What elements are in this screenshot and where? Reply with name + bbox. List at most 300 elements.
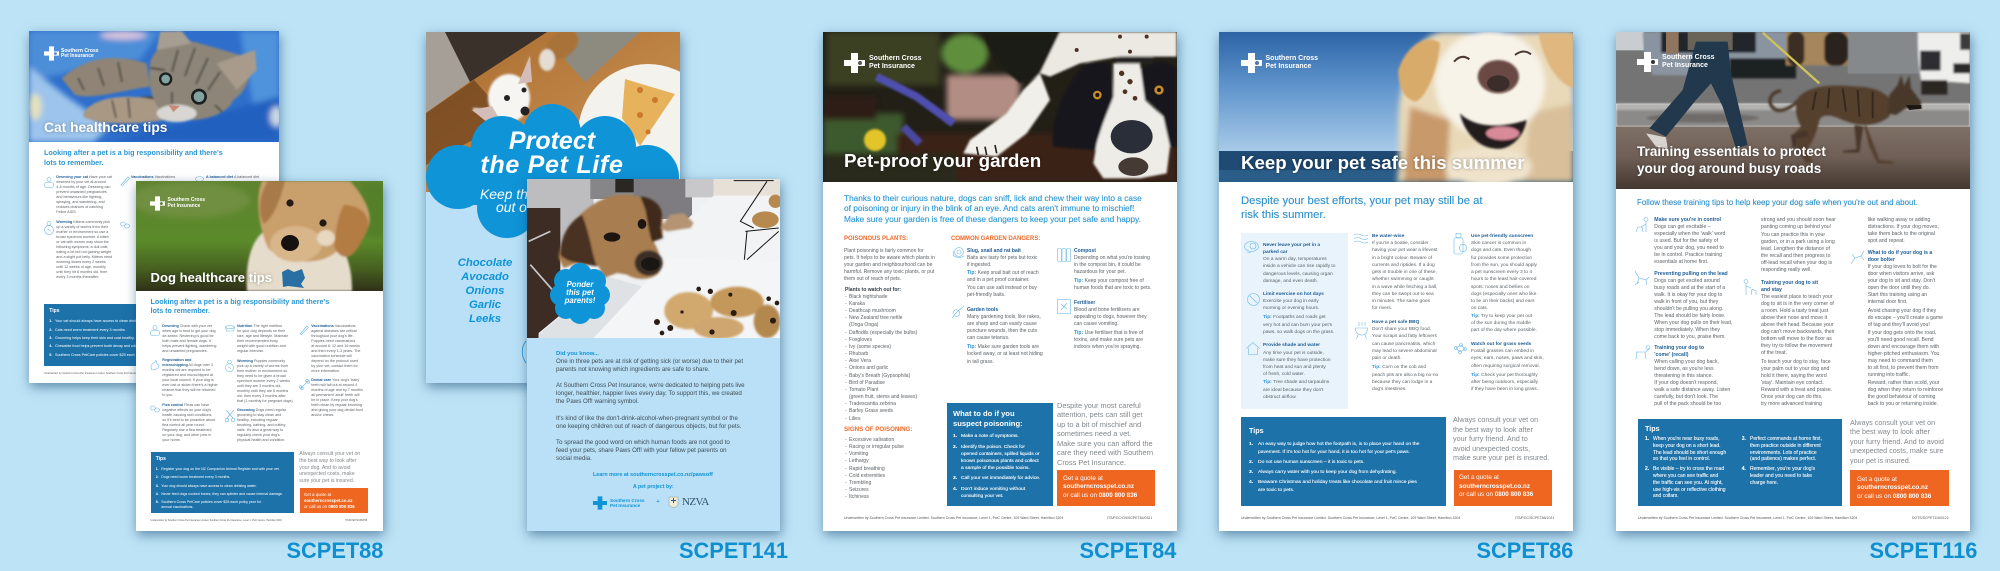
text: come recall: If your dog doesn't respond, — [1654, 380, 1718, 386]
text: make sure in control: Dogs can get excitable – — [1654, 224, 1711, 230]
text: poisonous plants — [844, 248, 935, 283]
text: desexing: spraying, and wandering, and — [56, 200, 105, 204]
text: flea control: your home. — [162, 438, 181, 442]
tip 3 — [1249, 469, 1397, 477]
text: preventing pulling continued: stop immediately. When they — [1654, 327, 1720, 333]
text: grass seeds: Foxtail grasses can embed in — [1471, 349, 1534, 354]
logo: Southern Cross Pet Insurance: Southern Cross — [610, 498, 644, 503]
tips heading: Tips — [1249, 426, 1264, 435]
label: SCPET84: SCPET84 — [1080, 538, 1176, 563]
callout text — [1453, 415, 1549, 463]
text: garden tools tip — [967, 344, 1043, 366]
list: signs of poisoning: - — [845, 494, 847, 500]
tips list: 5. — [49, 353, 52, 357]
text: preventing pulling — [1654, 271, 1728, 320]
tip 2 — [1645, 466, 1726, 500]
icon: fertiliser — [1057, 299, 1071, 314]
logo: Southern Cross — [1266, 55, 1318, 62]
callout text: make sure your pet is insured. — [1453, 453, 1549, 462]
text: sit and stay: dog to sit is in the very corner of — [1761, 301, 1834, 307]
text: registration: chance that they will be returned — [162, 388, 215, 392]
text: fertiliser: Blood and bone fertilisers are — [1074, 307, 1140, 313]
text: garden tools: Many gardening tools, like rakes, — [967, 314, 1041, 320]
text: sunscreen: dogs and cats. Even though — [1471, 248, 1531, 253]
text: flea control: Flea control Fleas can have — [162, 403, 209, 407]
callout text: Despite your most careful — [1057, 400, 1141, 410]
text: compost: Depending on what you're tossing — [1074, 255, 1150, 261]
text: recall practice — [1761, 232, 1835, 274]
list: plants to watch out for: Tradescantia zebrina — [849, 401, 896, 407]
text: dental care: teeth will fall out at around 4 — [311, 383, 357, 387]
callout text — [1057, 400, 1153, 467]
logo: Pet Insurance — [61, 53, 94, 59]
tip 1: keep your dog on a short lead. — [1653, 443, 1721, 449]
text: vaccinations: by your vet, contact them for — [311, 364, 358, 368]
text: fertiliser: appealing to dogs, however they — [1074, 314, 1147, 320]
text: stay continued: like walking away or adding — [1868, 217, 1930, 223]
list: signs of poisoning: Rapid breathing — [849, 466, 885, 472]
tip 1: so that you feel in control. — [1653, 456, 1710, 462]
badge text: this pet — [566, 288, 594, 296]
text: did you know heading: Did you know... — [556, 351, 599, 357]
text: sit and stay: a room. Hold a tasty treat just — [1761, 308, 1828, 314]
tips list: 2. — [49, 328, 52, 332]
text: gets onto the road: may need to command them — [1868, 358, 1933, 364]
quote text: southerncrosspet.co.nz — [304, 498, 352, 503]
text: did you know body: one keeping children out of reach of dangerous objects, but for pets. — [556, 423, 741, 430]
callout text: sure your pet is insured. — [299, 478, 354, 484]
text: worming: until 12 weeks of age, monthly — [56, 264, 106, 268]
tip 1: 1. — [1249, 442, 1253, 447]
text: reward: the good behaviour of coming — [1868, 394, 1935, 400]
text: slug, snail and rat bait: Baits are tasty for pets but toxic — [967, 255, 1037, 261]
text: have a pet safe BBQ: can cause pancreatitis, which — [1372, 342, 1435, 347]
text: desexing: and behaviours like fighting, — [56, 195, 102, 199]
text: sit and stay: bottom will move to the floor as — [1761, 336, 1832, 342]
text: preventing pulling: The lead should be fairly loose. — [1654, 313, 1725, 319]
text: teach stay: try more advanced training — [1761, 401, 1822, 407]
intro — [844, 192, 1142, 224]
text: provide shade: Any time your pet is outside, — [1263, 351, 1324, 356]
text: preventing pulling: busy roads and at the start of a — [1654, 285, 1725, 291]
intro: Make sure your garden is free of these dangers to keep your pet safe and happy. — [844, 214, 1141, 224]
text: worming: that (1 monthly for pregnant dogs). — [237, 398, 294, 402]
footer: Underwritten by Southern Cross Pet Insurance Limited. Southern Cross Pet Insurance, Level 1, PwC Centre, 109 Ward Street, Hamilton 3204 — [844, 516, 1063, 520]
text: flea control: so it's best to be proactive about — [162, 418, 215, 422]
icon: sun — [1247, 293, 1260, 306]
text: vaccinations: vaccination schedule will — [311, 354, 352, 358]
list: plants to watch out for: - — [845, 315, 847, 321]
text: slug tip: pet-friendly baits. — [967, 292, 1005, 298]
text: never leave your pet: On a warm day, temperatures — [1263, 257, 1327, 262]
tip 2: Be visible – try to cross the road — [1653, 466, 1724, 472]
icon: BBQ — [1355, 321, 1368, 339]
text: vaccinations — [311, 324, 360, 373]
panel: Pet-proof your garden flyer — [823, 32, 1177, 531]
text: dental care: all permanent 'adult' teeth will — [311, 393, 359, 397]
text: make sure in control: be in control. Practice training — [1654, 252, 1722, 258]
quote text: or call us on 0800 800 836 — [1857, 493, 1931, 500]
text: registration: ever lost or stolen there's a higher — [162, 383, 218, 387]
text: worming: and a slight pot belly. Kittens need — [56, 254, 112, 258]
text: teach stay: your palm out to your dog and — [1761, 366, 1829, 372]
tips list: Chewable food helps prevent tooth decay and odour. — [55, 344, 141, 348]
list: plants to watch out for: Black nightshade — [849, 294, 887, 300]
list: plants to watch out for: - — [845, 344, 847, 350]
badge text: parents! — [565, 296, 595, 304]
text: dental care: be in place. Keep your dog's — [311, 398, 358, 402]
text: garden tools tip: in tall grass. — [967, 359, 994, 365]
logo: NZVA: NZVA — [682, 496, 709, 508]
text: slug, snail and rat bait: if ingested. — [967, 262, 991, 268]
text: limit exercise tip: paws, so walk dogs on the grass. — [1263, 330, 1334, 335]
callout text: attention, pets can still get — [1057, 410, 1142, 419]
tip 4: 4. — [1249, 480, 1253, 485]
tip 4: are toxic to pets. — [1258, 488, 1294, 493]
list: plants to watch out for: - — [845, 358, 847, 364]
item 2: a sample of the possible toxins. — [961, 466, 1030, 471]
tips list: Never feed dogs cooked bones, they can splinter and cause internal damage. — [161, 492, 283, 496]
tip 4: Remember, you're your dog's — [1750, 466, 1815, 472]
logo — [150, 196, 205, 211]
text: provide shade: Provide shade and water — [1263, 343, 1320, 348]
text: poisonous plants: your garden and neighbourhood can be — [844, 262, 932, 268]
text: be water-wise: Be water-wise — [1372, 234, 1404, 239]
text: did you know body: It's kind of like the don't-drink-alcohol-when-pregnant symbol or the — [556, 415, 738, 422]
intro — [150, 298, 329, 315]
list: signs of poisoning: Racing or irregular pulse — [849, 444, 904, 450]
orange quote box — [1454, 470, 1552, 506]
text: did you know body: social media. — [556, 455, 592, 462]
list: plants to watch out for: Ivy (some species) — [849, 344, 891, 350]
text: fertiliser — [1074, 300, 1147, 328]
logo: Pet Insurance — [869, 63, 915, 70]
badge text — [550, 280, 610, 304]
text: poisonous plants: pets. It helps to be aware which plants in — [844, 255, 935, 261]
text: fertiliser tip: Tip: Use fertiliser that is free of — [1074, 330, 1143, 336]
list: signs of poisoning: - — [845, 480, 847, 486]
tips list: 1. — [156, 467, 159, 471]
list: plants to watch out for: Foxgloves — [849, 337, 872, 343]
text: slug, snail and rat bait — [967, 248, 1037, 269]
text: garden tools tip: Tip: Make sure garden tools are — [967, 344, 1039, 350]
text: BBQ tip: Tip: Corn on the cob and — [1372, 365, 1426, 370]
plus sign: + — [656, 499, 659, 505]
orange quote box — [1057, 470, 1155, 506]
text: nutrition: Nutrition The right nutrition — [237, 324, 282, 328]
list: plants to watch out for: Daffodils (especially the bulbs) — [849, 330, 917, 336]
text: grooming — [237, 408, 286, 442]
text: nutrition: weight with good nutrition and — [237, 344, 286, 348]
text: desexing: when age is best to get your dog — [162, 329, 216, 333]
text: desexing: desexed by your vet at around — [56, 180, 106, 184]
list: plants to watch out for: - — [845, 380, 847, 386]
title: your dog around busy roads — [1637, 160, 1821, 176]
list: signs of poisoning: Itchiness — [849, 494, 869, 500]
photo: person walking dog by road — [1616, 32, 1970, 189]
text: grass seeds: Watch out for grass seeds — [1471, 342, 1531, 347]
list: plants to watch out for: Plants to watch out for: — [845, 287, 901, 293]
text: compost tip — [1074, 278, 1151, 292]
footer: Underwritten by Southern Cross Pet Insurance Limited. Southern Cross Pet Insurance, Level 1, PwC Centre, 109 Ward Street, Hamilton 3204 — [1241, 516, 1460, 520]
callout text: your pet is insured. — [1850, 456, 1911, 465]
text: flea control: health causing skin conditions, — [162, 413, 212, 417]
text: stay continued: spot and repeat. — [1868, 238, 1905, 244]
quote text — [1459, 474, 1533, 500]
panel: Dog healthcare tips flyer — [136, 181, 383, 531]
quote text: Get a quote at — [1063, 474, 1103, 482]
text: never leave your pet — [1263, 242, 1335, 285]
text: BBQ tip: because they can lodge in a — [1372, 380, 1432, 385]
text: limit exercise: Exercise your dog in early — [1263, 299, 1319, 304]
what to do list: Make a note of symptoms. — [961, 434, 1019, 439]
tips list: 2. — [156, 475, 159, 479]
text: worming: their mother or environment so — [237, 368, 287, 372]
text: door bolter: your dog to sit and stay. Don't — [1868, 278, 1935, 284]
text: come recall: carefully, but don't look. The — [1654, 394, 1718, 400]
tip 1: 1. — [1645, 436, 1649, 442]
tip 3: then practice outside in different — [1750, 443, 1821, 449]
icon: door bolter — [1850, 250, 1865, 265]
text: fertiliser tip: indoors when you're spraying. — [1074, 344, 1141, 350]
text: BBQ tip: peach pits are also a big no-no — [1372, 373, 1438, 378]
text: worming — [56, 220, 112, 279]
text: grooming: healthy, including regular — [237, 418, 278, 422]
text: grass seeds — [1471, 341, 1544, 370]
what to do heading — [953, 408, 1023, 429]
logo — [1637, 52, 1721, 72]
text: never leave your pet: parked car — [1263, 250, 1288, 255]
text: provide shade: of fresh, cold water. — [1263, 372, 1305, 377]
tip 2: the traffic can see you. At night, — [1653, 480, 1723, 486]
list: plants to watch out for: Rhubarb — [849, 351, 868, 357]
tip 3 — [1742, 436, 1822, 463]
list: plants to watch out for: - — [845, 330, 847, 336]
callout text: Make sure you can afford the — [1057, 438, 1153, 448]
text: stay continued: take them back to the original — [1868, 231, 1935, 237]
icon: waves — [1354, 233, 1368, 244]
panel: Training essentials flyer — [1616, 32, 1970, 531]
text: garden tools: puncture wounds, then the cuts — [967, 328, 1037, 334]
photo: puppy on grass — [136, 181, 383, 291]
text: have a pet safe BBQ: may lead to severe abdominal — [1372, 349, 1437, 354]
text: come recall — [1654, 345, 1730, 408]
list: plants to watch out for: - — [845, 351, 847, 357]
icon: person and dog — [1635, 217, 1651, 234]
headline — [480, 127, 624, 178]
text: dental care: months of age and by 7 months — [311, 388, 363, 392]
text: be water-wise: having your pet wear a lifevest — [1372, 248, 1437, 253]
quote text: Get a quote at — [1857, 476, 1897, 482]
text: grass seeds: often requiring surgical removal. — [1471, 364, 1540, 369]
logo: NZVA crest — [668, 494, 679, 510]
text: garden tools: are sharp and can easily cause — [967, 321, 1037, 327]
text: be water-wise: If you're a boatie, consider — [1372, 241, 1429, 246]
tip 2: 2. — [1645, 466, 1649, 472]
text: did you know body: feed your pets, share Paws Off! with your fellow pet parents on — [556, 447, 727, 454]
photo: dog, cat and pizza in kitchen — [426, 32, 680, 192]
text: come recall: bend down, as you're less — [1654, 366, 1714, 372]
headline: the Pet Life — [480, 150, 624, 178]
text: reward — [1868, 380, 1943, 408]
text: teach stay: hold it there, saying the word — [1761, 373, 1827, 379]
text: recall continued: strong and you should soon hear — [1761, 217, 1836, 223]
text: desexing: reduces chances of catching — [56, 205, 103, 209]
text: worming: monthly until they are 6 months — [237, 388, 288, 392]
tip 2: use high-vis or reflective clothing — [1653, 487, 1726, 493]
tip 1: An easy way to judge how hot the footpath is, is to place your hand on the — [1258, 442, 1419, 447]
text: BBQ tip — [1372, 364, 1438, 393]
text: vaccinations: Vaccinations Vaccinations — [311, 324, 356, 328]
callout text: the best way to look after — [1453, 425, 1533, 434]
text: balanced diet: A balanced diet A balanced diet — [206, 175, 259, 179]
text: garden tools — [967, 307, 1041, 342]
text: garden tools: Garden tools — [967, 307, 998, 313]
tip 3: Perfect commands at home first, — [1750, 436, 1822, 442]
text: be water-wise: in a wave while fetching a ball, — [1372, 285, 1437, 290]
text: stay continued — [1868, 217, 1939, 245]
text: make sure in control: you and your dog, you need to — [1654, 245, 1724, 251]
text: poisonous plants: harmful. Remove any toxic plants, or put — [844, 269, 934, 275]
list: plants to watch out for: Onions and garlic — [849, 365, 888, 371]
panel: Protect the Pet Life poster — [426, 32, 680, 383]
icon: desexing — [150, 325, 160, 336]
cloud shape — [426, 104, 679, 238]
text: sit and stay: above their nose and move it — [1761, 315, 1827, 321]
text: recall continued — [1761, 217, 1836, 231]
callout text — [1850, 418, 1944, 465]
icon: worming — [44, 221, 54, 235]
text: limit exercise: Limit exercise on hot days — [1263, 292, 1324, 297]
icon: sunscreen bottle — [1453, 233, 1467, 255]
badge text: Ponder — [567, 280, 593, 288]
text: slug tip: and in a pet proof container. — [967, 277, 1030, 283]
intro — [1241, 194, 1483, 222]
list: plants to watch out for: - — [845, 373, 847, 379]
text: be water-wise: gets in trouble in one of these, — [1372, 270, 1437, 275]
text: sit and stay — [1761, 280, 1835, 357]
callout text: unexpected costs, make sure — [1850, 446, 1944, 455]
what to do list — [953, 433, 1019, 440]
tip 2 — [1249, 459, 1364, 467]
quote text: southerncrosspet.co.nz — [1459, 482, 1530, 490]
logo: Southern Cross — [1662, 54, 1715, 61]
list: plants to watch out for: Tomato Plant — [849, 387, 878, 393]
icon: dog on lead — [1634, 270, 1650, 286]
quote text: Get a quote at — [1459, 474, 1499, 481]
callout text: the best way to look after — [1850, 427, 1930, 436]
tips text: Tips — [49, 308, 60, 314]
text: reward: dog when they return to reinforce — [1868, 387, 1943, 393]
text: worming: broad spectrum wormer. A kitten — [56, 234, 109, 238]
panel: Cat healthcare tips flyer — [29, 31, 279, 383]
text: door bolter — [1868, 250, 1937, 306]
small cloud badge — [548, 261, 612, 326]
tips list: Your cat should always have access to clean drinking water. — [55, 319, 153, 323]
text: compost — [1074, 248, 1150, 276]
what to do heading: What to do if you — [953, 408, 1015, 418]
text: worming: following symptoms: a dull coat, — [56, 244, 108, 248]
callout text: your dog. And to avoid — [299, 464, 350, 470]
what to do heading: suspect poisoning: — [953, 419, 1023, 428]
text: worming: up a variety of worms from their — [56, 224, 108, 228]
subheading: out of reach — [496, 199, 569, 215]
text: desexing: prevent unwanted pregnancies — [56, 190, 107, 194]
item 2: Identify the poison. Check for — [961, 445, 1025, 450]
text: sunscreen: hours to the least hair-covered — [1471, 277, 1536, 282]
text: gets onto the road: you'll need good recall. Bend — [1868, 337, 1934, 343]
quote text: or call us on 0800 800 836 — [1063, 492, 1137, 499]
text: make sure in control — [1654, 217, 1725, 266]
callout text: avoid unexpected costs, — [1453, 444, 1530, 453]
intro: lots to remember. — [44, 159, 104, 167]
text: be water-wise — [1372, 233, 1437, 312]
tips box — [1638, 419, 1842, 506]
text: never leave your pet: dangerous levels, causing organ — [1263, 272, 1333, 277]
text: be water-wise: in a bright colour. Beware of — [1372, 256, 1432, 261]
text: teach stay — [1761, 359, 1832, 408]
text: grass seeds: eyes, ears, noses, paws and skin, — [1471, 356, 1544, 361]
text: preventing pulling continued: When your dog pulls on their lead, — [1654, 320, 1732, 326]
text: door bolter: Start this training using an — [1868, 292, 1927, 298]
tip 3: 3. — [1742, 436, 1746, 442]
text: gets onto the road: higher-pitched enthusiasm. You — [1868, 351, 1939, 357]
text: worming: pick up a variety of worms from — [237, 364, 288, 368]
intro: Despite your best efforts, your pet may still be at — [1241, 194, 1483, 206]
quote text: or call us on 0800 800 836 — [1459, 491, 1533, 498]
text: come recall: walk a safe distance away. Listen — [1654, 387, 1730, 393]
text: compost tip: human foods that are toxic to pets. — [1074, 285, 1151, 291]
logo: Southern Cross Pet Insurance: Pet Insurance — [610, 503, 640, 508]
text: sunscreen: to lie on their backs) and ears — [1471, 299, 1535, 304]
list: plants to watch out for: (Onga Onga) — [849, 322, 878, 328]
icon: worming — [225, 360, 234, 372]
list: plants to watch out for: - — [845, 387, 847, 393]
text: nutrition: regular exercise. — [237, 349, 264, 353]
text: grooming: Grooming Dogs need regular — [237, 408, 286, 412]
icon: bone — [299, 379, 310, 390]
text: sunscreen tip: of the sun during the middle — [1471, 321, 1531, 326]
text: sit and stay: above their head. Because your — [1761, 322, 1834, 328]
title: Pet-proof your garden — [844, 150, 1041, 171]
list: signs of poisoning: Vomiting — [849, 451, 868, 457]
text: come recall: 'come' (recall) — [1654, 352, 1688, 358]
item 2: opened containers, spilled liquids or — [961, 452, 1040, 457]
footer: Underwritten by Southern Cross Pet Insurance Limited. Southern Cross Pet Insurance, Level 1, PwC Centre, Hamilton 3204 — [150, 519, 282, 522]
text: have a pet safe BBQ: pain or death. — [1372, 356, 1402, 361]
photo: dog eyeing cookies on counter — [527, 179, 780, 338]
list: plants to watch out for — [845, 287, 917, 423]
tips list — [49, 319, 154, 357]
logo — [844, 53, 928, 73]
photo: golden dog at the beach — [1219, 32, 1573, 182]
callout text: your furry friend. And to avoid — [1850, 437, 1944, 446]
callout text: up to a bit of mischief and — [1057, 420, 1141, 428]
text: sunscreen: on cats. — [1471, 306, 1488, 311]
tip 3: environments. Lots of practice — [1750, 450, 1817, 456]
intro: Follow these training tips to help keep your dog safe when you're out and about. — [1637, 198, 1918, 206]
text: desexing: both male and female dogs. It — [162, 339, 211, 343]
text: limit exercise: morning or evening hours. — [1263, 306, 1319, 311]
item 2: known poisonous plants and collect — [961, 459, 1039, 464]
text: desexing — [56, 175, 112, 214]
callout text: unexpected costs, make — [299, 471, 355, 477]
text: dental care: and/or chews. — [311, 413, 334, 417]
logo: Southern Cross — [869, 55, 922, 62]
text: sit and stay: The easiest place to teach your — [1761, 294, 1832, 300]
text: flea control: on your dog, and other pets in — [162, 433, 211, 437]
text: sunscreen: fur provides some protection — [1471, 256, 1532, 261]
